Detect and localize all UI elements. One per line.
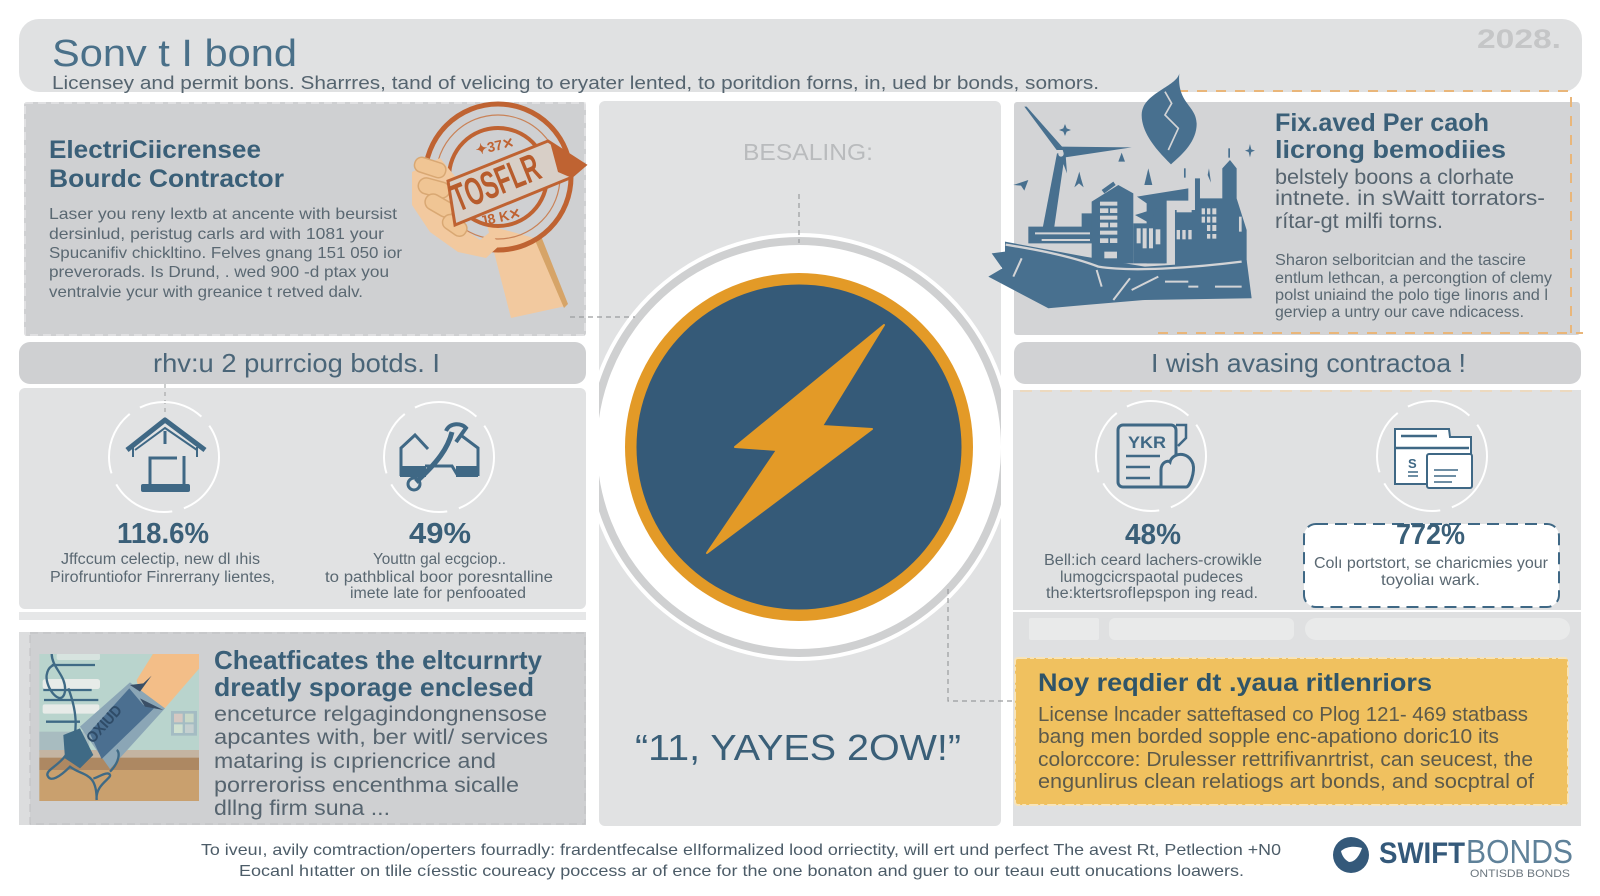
body text: preverorads. Is Drund, . wed 900 -d ptax you [49, 264, 389, 281]
callout: 772%: toyoliaı wark. [1381, 572, 1480, 589]
callout body: colorccore: Drulesser rettrifivanrtrist, can seucest, the [1038, 749, 1533, 771]
callout heading: Noy reqdier dt .yaua ritlenriors [1038, 669, 1432, 697]
stat description: imete late for penfooated [350, 585, 526, 602]
logo: Swift Bonds: ONTISDB BONDS [1470, 868, 1570, 880]
stat description: lumogcicrspaotal pudeces [1060, 569, 1243, 586]
icon: hand with stamp: TOSFLR [445, 146, 547, 220]
detail text: gerviep a untry our cave ndicacess. [1275, 304, 1524, 321]
detail text: Sharon selboritcian and the tascire [1275, 252, 1526, 269]
heading: Cheatficates the eltcurnrty [214, 645, 543, 675]
callout: 772%: 772% [1396, 519, 1465, 551]
panel: electrician license bond [24, 102, 586, 336]
icon: wind turbine, city and drop [988, 73, 1255, 308]
intro text [1275, 166, 1545, 233]
orange dashed frame [1158, 91, 1583, 333]
body text: apcantes with, ber witl/ services [214, 726, 548, 749]
panel: electrician license bond: Bourdc Contractor [49, 165, 284, 193]
stat: 118.6%: 118.6% [117, 518, 209, 550]
year label: 2028. [1477, 24, 1561, 54]
intro text: rítar-gt milfi torns. [1275, 210, 1443, 233]
icon: house with laptop [109, 402, 219, 512]
detail text: polst uniaind the polo tige linorıs and l [1275, 287, 1548, 304]
band: left section heading [19, 342, 586, 384]
subtitle: Licensey and permit bons. Sharrres, tand of velicing to eryater lented, to poritdion forns, in, ued br bonds, somors. [52, 73, 1099, 93]
heading: Fix.aved Per caoh [1275, 109, 1489, 137]
panel: left statistics [19, 384, 586, 620]
callout body [1038, 704, 1534, 793]
title: Sonv t I bond [52, 33, 297, 75]
footer text [201, 842, 1281, 880]
stat description: Pirofruntiofor Finrerrany lientes, [50, 569, 275, 586]
callout body: engunlirus clean relatiogs art bonds, and socptral of [1038, 771, 1534, 793]
callout: 772%: Colı portstort, se charicmies your [1314, 555, 1548, 572]
icon: documents: S [1408, 456, 1417, 471]
logo: Swift Bonds: SWIFT [1379, 837, 1465, 870]
panel: right upper wind and city [988, 73, 1583, 335]
body text: porreroriss encenthma sicalle [214, 774, 519, 797]
buildings [1092, 185, 1133, 263]
body text: Laser you reny lextb at ancente with beursist [49, 206, 398, 223]
stat description [1044, 552, 1262, 602]
stat description [50, 551, 275, 586]
icon: houses with wrench [384, 402, 494, 512]
emblem circle [585, 233, 1013, 661]
band: right section heading: I wish avasing contractoa ! [1151, 348, 1466, 378]
header banner [19, 19, 1582, 93]
heading: ElectriCiicrensee [49, 136, 261, 164]
body text: Spucanifiv chickltino. Felves gnang 151 050 ior [49, 245, 403, 262]
icon: hand with stamp [412, 104, 585, 318]
stat: 49%: 49% [409, 518, 471, 550]
quote: “11, YAYES 2OW!” [635, 727, 961, 768]
body text [49, 206, 403, 301]
callout body: bang men borded sopple enc-apationo doric10 its [1038, 726, 1499, 748]
panel: right statistics [1013, 390, 1581, 610]
body text: dllng firm suna ... [214, 797, 390, 820]
intro text: belstely boons a clorhate [1275, 166, 1514, 189]
detail text [1275, 252, 1552, 321]
panel: certificates: dreatly sporage enclesed [214, 672, 534, 702]
icon: hand with stamp: ✦37✕ [474, 134, 516, 158]
logo: Swift Bonds: BONDS [1466, 833, 1573, 870]
footer text: Eocanl hıtatter on tlile cíesstic coureacy poccess ar of ence for the one bonaton and guer to our teauı eutt onucations loawers. [239, 863, 1244, 880]
placeholder pills [1029, 618, 1570, 640]
stat description: Bell:ich ceard lachers-crowikle [1044, 552, 1262, 569]
footer text: To iveuı, avily comtraction/operters fourradly: frardentfecalse elIformalized lood orriectity, will ert und perfect The avest Rt, Petlection +N0 [201, 842, 1281, 859]
body text: mataring is cıpriencrice and [214, 750, 496, 773]
stat: 48%: 48% [1125, 519, 1181, 551]
band: left section heading: rhv:u 2 purrciog botds. I [153, 348, 440, 378]
icon: hand with stamp: J8 K✕ [478, 205, 522, 229]
stat description: to pathblical boor poresntalline [325, 569, 553, 586]
illustration: hand with bond document: OXIUD [83, 702, 126, 747]
body text: dersinlud, peristug carls ard with 1081 your [49, 226, 385, 243]
callout: yellow note [1015, 658, 1568, 805]
intro text: intnete. in sWaitt torrators- [1275, 187, 1545, 210]
illustration: hand with bond document [39, 653, 199, 801]
stat description: Jffccum celectip, new dl ıhis [61, 551, 260, 568]
body text [214, 703, 548, 820]
body text: enceturce relgagindongnensose [214, 703, 547, 726]
callout: 772% [1304, 519, 1559, 607]
ground [988, 242, 1252, 308]
stat description: the:ktertsrofIepspon ing read. [1046, 585, 1258, 602]
stat description: Youttn gal ecgciop.. [373, 551, 506, 568]
icon: lightning bolt [707, 325, 884, 553]
panel: certificates [19, 632, 586, 825]
body text: ventralvie ycur with greanice t retved dalv. [49, 284, 363, 301]
band: right section heading [1014, 342, 1581, 384]
icon: certificate with fist [1096, 401, 1206, 511]
detail text: entlum lethcan, a percongtion of clemy [1275, 270, 1552, 287]
icon: documents [1377, 401, 1487, 511]
panel: central emblem column [585, 101, 1013, 826]
panel: right upper wind and city: licrong bemodiies [1275, 136, 1506, 164]
callout body: License lncader satteftased co Plog 121- 469 statbass [1038, 704, 1528, 726]
logo: Swift Bonds [1333, 833, 1573, 880]
icon: certificate with fist: YKR [1128, 433, 1166, 452]
panel: right lower section [1013, 611, 1581, 826]
label: besaling: BESALING: [743, 139, 873, 165]
stat description [325, 551, 553, 602]
